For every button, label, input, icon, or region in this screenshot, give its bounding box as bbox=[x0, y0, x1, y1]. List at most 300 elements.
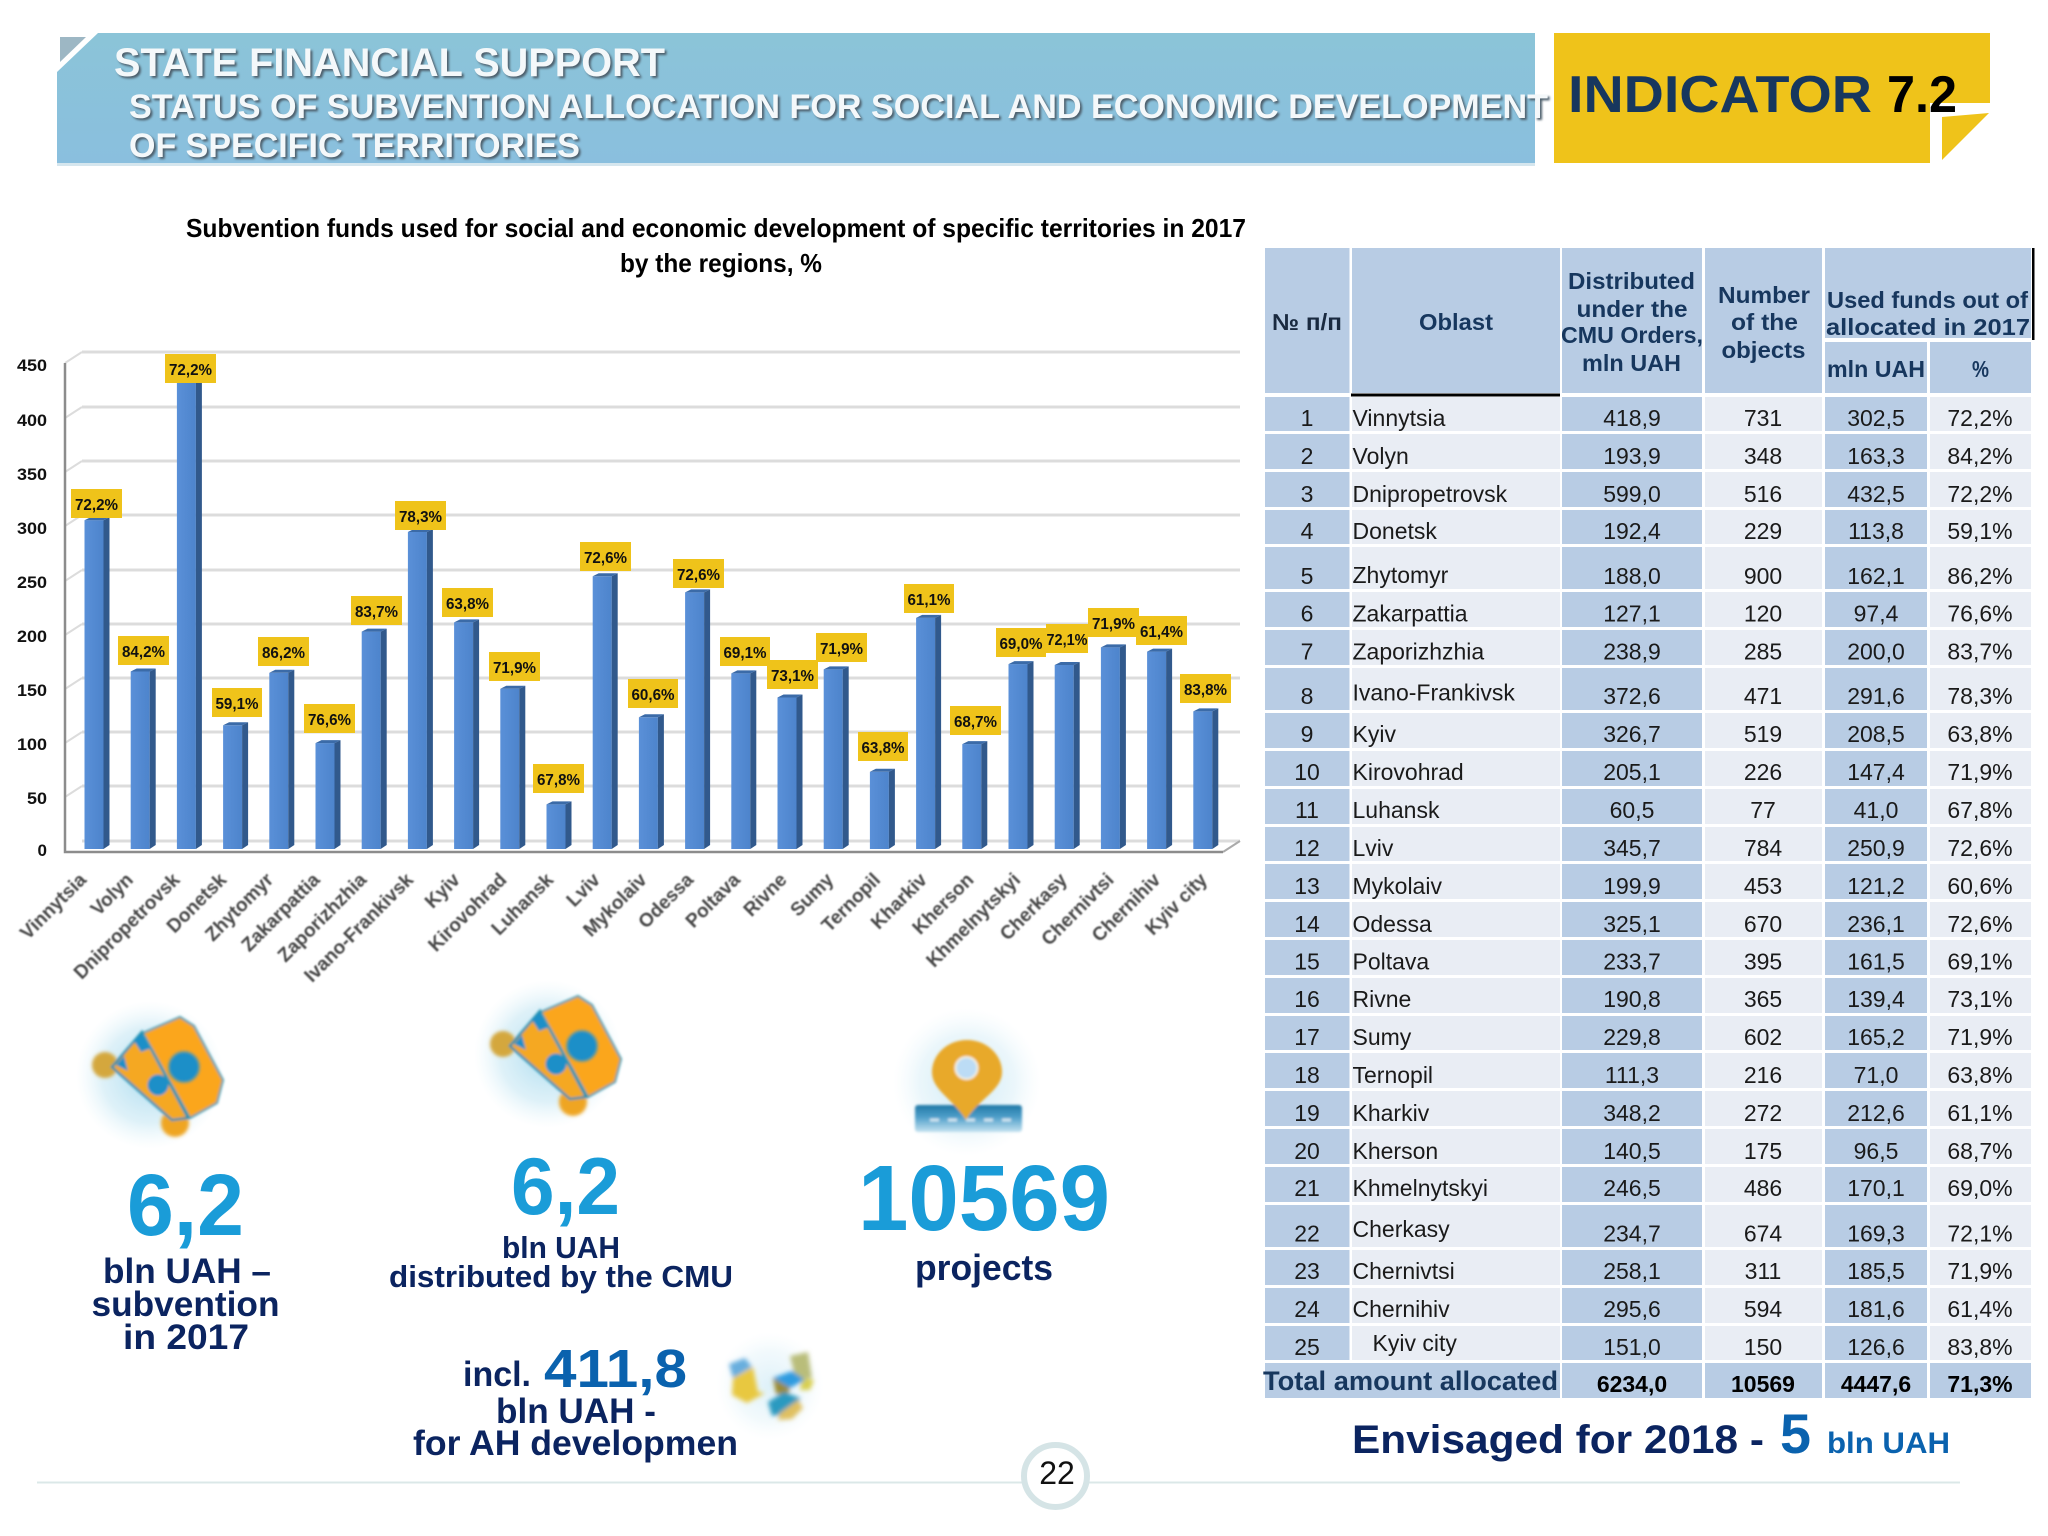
row 23: 185,5 bbox=[1847, 1258, 1905, 1284]
row 13: Mykolaiv bbox=[1352, 873, 1442, 899]
row 12 bbox=[1294, 835, 2013, 861]
row 3: 516 bbox=[1744, 481, 1782, 507]
row 14: 14 bbox=[1294, 911, 1320, 937]
stat: 10569 projects: projects bbox=[915, 1247, 1053, 1288]
row 8: 8 bbox=[1301, 683, 1313, 709]
total row: 4447,6 bbox=[1841, 1371, 1911, 1397]
row 3: 72,2% bbox=[1947, 481, 2013, 507]
bar value labels: 60,6% bbox=[632, 687, 675, 704]
row 14: 236,1 bbox=[1847, 911, 1905, 937]
table header: Oblast bbox=[1419, 309, 1493, 335]
row 4 bbox=[1301, 518, 2013, 544]
row 14: Odessa bbox=[1352, 911, 1432, 937]
category axis labels bbox=[17, 869, 1212, 987]
row 25: Kyiv city bbox=[1372, 1330, 1457, 1356]
row 23: 311 bbox=[1745, 1258, 1781, 1284]
table header: Number bbox=[1718, 282, 1810, 308]
bar value labels: 83,8% bbox=[1184, 682, 1227, 699]
category axis labels: Kharkiv bbox=[867, 869, 932, 934]
row 20: 96,5 bbox=[1854, 1138, 1898, 1164]
icon: building blocks bbox=[716, 1332, 824, 1440]
row 2: 193,9 bbox=[1603, 443, 1661, 469]
stat: 10569 projects: 10569 bbox=[858, 1146, 1110, 1250]
row 24: Chernihiv bbox=[1352, 1296, 1450, 1322]
row 3: 432,5 bbox=[1847, 481, 1905, 507]
bar value labels: 71,9% bbox=[493, 660, 536, 677]
row 7: 7 bbox=[1301, 638, 1313, 664]
table header: Distributed bbox=[1568, 268, 1695, 294]
row 12: 345,7 bbox=[1603, 835, 1661, 861]
row 1: 302,5 bbox=[1847, 405, 1905, 431]
envisaged for 2018 note: Envisaged for 2018 - bbox=[1352, 1418, 1764, 1462]
row 9: 63,8% bbox=[1947, 721, 2013, 747]
row 23: 258,1 bbox=[1603, 1258, 1661, 1284]
row 16: 365 bbox=[1744, 986, 1782, 1012]
bar value labels: 78,3% bbox=[399, 509, 442, 526]
row 7: Zaporizhzhia bbox=[1352, 638, 1484, 664]
row 8: 372,6 bbox=[1603, 683, 1661, 709]
bar chart bbox=[17, 352, 1240, 987]
table body backgrounds bbox=[1265, 397, 2031, 1360]
page number badge: 22 bbox=[1039, 1455, 1075, 1491]
row 18: 111,3 bbox=[1605, 1062, 1659, 1088]
row 1: 731 bbox=[1744, 405, 1782, 431]
row 2: 163,3 bbox=[1847, 443, 1905, 469]
row 19: 61,1% bbox=[1947, 1100, 2013, 1126]
row 10: Kirovohrad bbox=[1352, 759, 1464, 785]
heading: state financial support: STATE FINANCIAL SUPPORT bbox=[114, 41, 665, 85]
row 3: 599,0 bbox=[1603, 481, 1661, 507]
row 10: 10 bbox=[1294, 759, 1320, 785]
y axis labels: 250 bbox=[17, 573, 47, 592]
row 23: Chernivtsi bbox=[1352, 1258, 1455, 1284]
stat: 411,8 for AH development: 411,8 bbox=[544, 1339, 687, 1399]
stat: 6,2 subvention: in 2017 bbox=[123, 1318, 249, 1357]
bar value labels: 71,9% bbox=[820, 641, 863, 658]
table header: of the bbox=[1731, 309, 1798, 335]
y axis labels: 100 bbox=[17, 735, 47, 754]
row 22: 674 bbox=[1744, 1220, 1782, 1246]
row 9: Kyiv bbox=[1352, 721, 1396, 747]
indicator word: INDICATOR bbox=[1568, 66, 1872, 124]
category axis labels: Rivne bbox=[740, 870, 792, 921]
row 9: 519 bbox=[1744, 721, 1782, 747]
row 5: 188,0 bbox=[1603, 563, 1661, 589]
row 22 bbox=[1294, 1216, 2013, 1246]
row 1 bbox=[1301, 405, 2013, 431]
row 17 bbox=[1294, 1024, 2013, 1050]
row 17: 71,9% bbox=[1947, 1024, 2013, 1050]
row 12: 784 bbox=[1744, 835, 1782, 861]
row 19: 272 bbox=[1744, 1100, 1782, 1126]
table header: Used funds out of bbox=[1827, 287, 2028, 313]
row 1: Vinnytsia bbox=[1352, 405, 1446, 431]
row 12: Lviv bbox=[1352, 835, 1394, 861]
stat: 411,8 for AH development: for AH developmen bbox=[413, 1424, 738, 1463]
row 6 bbox=[1301, 600, 2013, 626]
total row bbox=[1263, 1363, 2031, 1398]
envisaged for 2018 note bbox=[1352, 1402, 1950, 1465]
row 1: 72,2% bbox=[1947, 405, 2013, 431]
row 16: 190,8 bbox=[1603, 986, 1661, 1012]
category axis labels: Odessa bbox=[635, 869, 698, 933]
bar value labels: 63,8% bbox=[862, 740, 905, 757]
row 25: 126,6 bbox=[1847, 1334, 1905, 1360]
stat: 6,2 subvention: 6,2 bbox=[127, 1157, 244, 1254]
row 18: 71,0 bbox=[1854, 1062, 1898, 1088]
row 18 bbox=[1294, 1062, 2013, 1088]
table header: mln UAH bbox=[1582, 350, 1681, 376]
row 21: 21 bbox=[1294, 1175, 1320, 1201]
row 18: 63,8% bbox=[1947, 1062, 2013, 1088]
row 20: 68,7% bbox=[1947, 1138, 2013, 1164]
row 17: 229,8 bbox=[1603, 1024, 1661, 1050]
bar value labels: 61,1% bbox=[908, 592, 951, 609]
row 20 bbox=[1294, 1138, 2013, 1164]
row 20: Kherson bbox=[1352, 1138, 1438, 1164]
row 10: 147,4 bbox=[1847, 759, 1905, 785]
row 4: Donetsk bbox=[1352, 518, 1437, 544]
row 4: 4 bbox=[1301, 518, 1314, 544]
bar value labels: 84,2% bbox=[122, 644, 165, 661]
row 16: 139,4 bbox=[1847, 986, 1905, 1012]
y axis labels bbox=[17, 356, 47, 860]
category axis labels: Zhytomyr bbox=[202, 869, 278, 946]
indicator number: 7.2 bbox=[1887, 66, 1957, 124]
row 3: Dnipropetrovsk bbox=[1352, 481, 1508, 507]
y axis labels: 300 bbox=[17, 519, 47, 538]
row 11: 60,5 bbox=[1610, 797, 1654, 823]
row 6: 127,1 bbox=[1603, 600, 1661, 626]
row 18: 216 bbox=[1744, 1062, 1782, 1088]
row 9 bbox=[1301, 721, 2013, 747]
row 20: 175 bbox=[1744, 1138, 1782, 1164]
row 15: 161,5 bbox=[1847, 948, 1905, 974]
footer rule bbox=[37, 1482, 1960, 1484]
row 9: 208,5 bbox=[1847, 721, 1905, 747]
table header bbox=[1265, 248, 2034, 396]
row 9: 326,7 bbox=[1603, 721, 1661, 747]
row 7: 83,7% bbox=[1947, 638, 2013, 664]
envisaged for 2018 note: 5 bbox=[1780, 1402, 1811, 1465]
row 9: 9 bbox=[1301, 721, 1313, 747]
row 19: 19 bbox=[1294, 1100, 1320, 1126]
y axis labels: 150 bbox=[17, 681, 47, 700]
category axis labels: Mykolaiv bbox=[580, 869, 652, 941]
category axis labels: Chernivtsi bbox=[1038, 870, 1118, 950]
y axis labels: 400 bbox=[17, 411, 47, 430]
page number badge bbox=[1024, 1445, 1087, 1507]
row 14: 670 bbox=[1744, 911, 1782, 937]
icon: money 1 bbox=[76, 1001, 224, 1149]
row 5: 900 bbox=[1744, 563, 1782, 589]
row 16: Rivne bbox=[1352, 986, 1411, 1012]
row 6: 120 bbox=[1744, 600, 1782, 626]
row 18: 18 bbox=[1294, 1062, 1320, 1088]
row 13: 199,9 bbox=[1603, 873, 1661, 899]
row 20: 20 bbox=[1294, 1138, 1320, 1164]
category axis labels: Ivano-Frankivsk bbox=[301, 869, 418, 987]
row 17: 17 bbox=[1294, 1024, 1320, 1050]
total row: 71,3% bbox=[1947, 1371, 2013, 1397]
row 12: 72,6% bbox=[1947, 835, 2013, 861]
row 13: 453 bbox=[1744, 873, 1782, 899]
row 13: 60,6% bbox=[1947, 873, 2013, 899]
stat: 6,2 distributed by the CMU: distributed by the CMU bbox=[389, 1259, 733, 1294]
row 21 bbox=[1294, 1175, 2013, 1201]
stat: 6,2 subvention: bln UAH – bbox=[103, 1252, 271, 1291]
category axis labels: Dnipropetrovsk bbox=[70, 869, 185, 984]
total row: 6234,0 bbox=[1597, 1371, 1667, 1397]
table header: mln UAH bbox=[1827, 356, 1925, 382]
row 20: 140,5 bbox=[1603, 1138, 1661, 1164]
row 8: 471 bbox=[1744, 683, 1782, 709]
row 16: 73,1% bbox=[1947, 986, 2013, 1012]
row 15: 15 bbox=[1294, 948, 1320, 974]
row 2: 348 bbox=[1744, 443, 1782, 469]
category axis labels: Zaporizhzhia bbox=[274, 869, 372, 967]
row 21: 170,1 bbox=[1847, 1175, 1905, 1201]
row 7: 200,0 bbox=[1847, 638, 1905, 664]
row 23: 23 bbox=[1294, 1258, 1320, 1284]
row 2: 84,2% bbox=[1947, 443, 2013, 469]
row 17: Sumy bbox=[1352, 1024, 1412, 1050]
category axis labels: Volyn bbox=[87, 870, 138, 920]
bar value labels: 68,7% bbox=[954, 714, 997, 731]
row 5 bbox=[1301, 562, 2013, 589]
row 8: 78,3% bbox=[1947, 683, 2013, 709]
row 15: 233,7 bbox=[1603, 948, 1661, 974]
header banner bbox=[57, 33, 1548, 166]
bar value labels: 63,8% bbox=[446, 596, 489, 613]
stat: 411,8 for AH development: incl. bbox=[463, 1355, 531, 1394]
row 15: Poltava bbox=[1352, 948, 1429, 974]
row 21: 486 bbox=[1744, 1175, 1782, 1201]
row 22: 22 bbox=[1294, 1220, 1320, 1246]
category axis labels: Kherson bbox=[909, 870, 978, 939]
category axis labels: Vinnytsia bbox=[17, 869, 91, 944]
row 13: 13 bbox=[1294, 873, 1320, 899]
row 11: 41,0 bbox=[1854, 797, 1898, 823]
row 24 bbox=[1294, 1296, 2013, 1322]
row 19 bbox=[1294, 1100, 2013, 1126]
row 22: 234,7 bbox=[1603, 1220, 1661, 1246]
row 25: 25 bbox=[1294, 1334, 1320, 1360]
row 12: 250,9 bbox=[1847, 835, 1905, 861]
row 23: 71,9% bbox=[1947, 1258, 2013, 1284]
stat: 411,8 for AH development: bln UAH - bbox=[496, 1392, 656, 1431]
row 7: 285 bbox=[1744, 638, 1782, 664]
bar value labels: 72,6% bbox=[584, 550, 627, 567]
bar value labels: 71,9% bbox=[1092, 616, 1135, 633]
chart title: by the regions, % bbox=[620, 248, 822, 278]
row 11: 67,8% bbox=[1947, 797, 2013, 823]
row 1: 1 bbox=[1301, 405, 1313, 431]
row 18: Ternopil bbox=[1352, 1062, 1433, 1088]
row 5: Zhytomyr bbox=[1352, 562, 1449, 588]
row 21: Khmelnytskyi bbox=[1352, 1175, 1488, 1201]
chart grid bbox=[65, 352, 1240, 852]
row 22: 72,1% bbox=[1947, 1220, 2013, 1246]
chart title bbox=[186, 213, 1246, 278]
y axis labels: 50 bbox=[27, 789, 47, 808]
total row: Total amount allocated bbox=[1263, 1366, 1558, 1396]
row 3 bbox=[1301, 481, 2013, 507]
row 2: Volyn bbox=[1352, 443, 1409, 469]
bar value labels: 69,1% bbox=[724, 645, 767, 662]
category axis labels: Zakarpattia bbox=[238, 869, 325, 956]
row 10: 226 bbox=[1744, 759, 1782, 785]
row 25: 150 bbox=[1744, 1334, 1782, 1360]
row 6: 76,6% bbox=[1947, 600, 2013, 626]
table header: allocated in 2017 bbox=[1826, 314, 2030, 340]
stat: 6,2 subvention bbox=[92, 1157, 280, 1357]
category axis labels: Donetsk bbox=[163, 869, 231, 938]
row 13: 121,2 bbox=[1847, 873, 1905, 899]
category axis labels: Chernihiv bbox=[1088, 869, 1165, 946]
row 5: 162,1 bbox=[1847, 563, 1905, 589]
row 23 bbox=[1294, 1258, 2013, 1284]
row 21: 246,5 bbox=[1603, 1175, 1661, 1201]
row 2: 2 bbox=[1301, 443, 1313, 469]
indicator badge bbox=[1554, 33, 1990, 163]
row 11: Luhansk bbox=[1352, 797, 1440, 823]
category axis labels: Kyiv city bbox=[1142, 869, 1212, 940]
row 14: 325,1 bbox=[1603, 911, 1661, 937]
row 25: 83,8% bbox=[1947, 1334, 2013, 1360]
category axis labels: Luhansk bbox=[488, 869, 558, 940]
bar value labels bbox=[71, 354, 1231, 793]
row 4: 113,8 bbox=[1848, 518, 1904, 544]
category axis labels: Lviv bbox=[563, 869, 605, 911]
row 15: 395 bbox=[1744, 948, 1782, 974]
bar value labels: 76,6% bbox=[308, 712, 351, 729]
category axis labels: Ternopil bbox=[818, 870, 885, 937]
category axis labels: Khmelnytskyi bbox=[923, 870, 1025, 972]
row 19: 212,6 bbox=[1847, 1100, 1905, 1126]
bar value labels: 86,2% bbox=[262, 645, 305, 662]
row 11: 77 bbox=[1750, 797, 1776, 823]
stat: 6,2 distributed by the CMU: 6,2 bbox=[511, 1142, 620, 1232]
row 24: 594 bbox=[1744, 1296, 1782, 1322]
row 3: 3 bbox=[1301, 481, 1313, 507]
row 19: 348,2 bbox=[1603, 1100, 1661, 1126]
stat: 6,2 distributed by the CMU: bln UAH bbox=[502, 1230, 620, 1265]
row 6: 6 bbox=[1301, 600, 1313, 626]
bar value labels: 83,7% bbox=[355, 604, 398, 621]
stat: 411,8 for AH development bbox=[413, 1339, 738, 1463]
table header: № п/п bbox=[1272, 309, 1342, 335]
icon: money 2 bbox=[474, 980, 622, 1128]
category axis labels: Sumy bbox=[787, 869, 839, 921]
row 7: 238,9 bbox=[1603, 638, 1661, 664]
total row: 10569 bbox=[1731, 1371, 1795, 1397]
row 16 bbox=[1294, 986, 2013, 1012]
row 11 bbox=[1295, 797, 2013, 823]
row 2 bbox=[1301, 443, 2013, 469]
row 12: 12 bbox=[1294, 835, 1320, 861]
row 7 bbox=[1301, 638, 2013, 664]
table header: CMU Orders, bbox=[1561, 322, 1703, 348]
row 14 bbox=[1294, 911, 2013, 937]
row 11: 11 bbox=[1295, 797, 1319, 823]
table bbox=[1263, 248, 2034, 1398]
envisaged for 2018 note: bln UAH bbox=[1827, 1427, 1950, 1460]
row 22: Cherkasy bbox=[1352, 1216, 1450, 1242]
table header: % bbox=[1972, 356, 1989, 382]
category axis labels: Kyiv bbox=[421, 869, 465, 913]
bar value labels: 69,0% bbox=[1000, 636, 1043, 653]
row 25 bbox=[1294, 1330, 2013, 1360]
subheading line 2: OF SPECIFIC TERRITORIES bbox=[129, 127, 580, 165]
bar value labels: 67,8% bbox=[537, 772, 580, 789]
stat: 6,2 subvention: subvention bbox=[92, 1285, 280, 1324]
category axis labels: Kirovohrad bbox=[425, 870, 511, 956]
row 5: 5 bbox=[1301, 563, 1313, 589]
bar value labels: 72,1% bbox=[1046, 632, 1088, 649]
bar value labels: 72,6% bbox=[677, 567, 720, 584]
category axis labels: Poltava bbox=[682, 869, 745, 932]
row 24: 181,6 bbox=[1847, 1296, 1905, 1322]
bar value labels: 72,2% bbox=[75, 497, 118, 514]
y axis labels: 450 bbox=[17, 356, 47, 375]
y axis labels: 350 bbox=[17, 465, 47, 484]
row 22: 169,3 bbox=[1847, 1220, 1905, 1246]
subheading line 1: STATUS OF SUBVENTION ALLOCATION FOR SOCIAL AND ECONOMIC DEVELOPMENT bbox=[129, 88, 1548, 126]
row 10: 205,1 bbox=[1603, 759, 1661, 785]
bar value labels: 59,1% bbox=[216, 696, 259, 713]
row 24: 24 bbox=[1294, 1296, 1320, 1322]
row 6: Zakarpattia bbox=[1352, 600, 1468, 626]
row 1: 418,9 bbox=[1603, 405, 1661, 431]
row 10 bbox=[1294, 759, 2013, 785]
bar value labels: 72,2% bbox=[169, 362, 212, 379]
row 19: Kharkiv bbox=[1352, 1100, 1430, 1126]
row 16: 16 bbox=[1294, 986, 1320, 1012]
row 15: 69,1% bbox=[1947, 948, 2013, 974]
y axis labels: 200 bbox=[17, 627, 47, 646]
row 8 bbox=[1301, 680, 2013, 709]
table header: objects bbox=[1722, 337, 1806, 363]
row 5: 86,2% bbox=[1947, 563, 2013, 589]
row 8: 291,6 bbox=[1847, 683, 1905, 709]
row 4: 192,4 bbox=[1603, 518, 1661, 544]
row 10: 71,9% bbox=[1947, 759, 2013, 785]
row 21: 69,0% bbox=[1947, 1175, 2013, 1201]
row 8: Ivano-Frankivsk bbox=[1352, 680, 1515, 706]
row 4: 59,1% bbox=[1947, 518, 2013, 544]
stat: 6,2 distributed by the CMU bbox=[389, 1142, 733, 1294]
row 6: 97,4 bbox=[1854, 600, 1899, 626]
row 17: 602 bbox=[1744, 1024, 1782, 1050]
bar value labels: 61,4% bbox=[1140, 624, 1183, 641]
row 15 bbox=[1294, 948, 2013, 974]
row 4: 229 bbox=[1744, 518, 1782, 544]
row 14: 72,6% bbox=[1947, 911, 2013, 937]
row 24: 295,6 bbox=[1603, 1296, 1661, 1322]
row 25: 151,0 bbox=[1603, 1334, 1661, 1360]
bars bbox=[84, 376, 1218, 849]
row 17: 165,2 bbox=[1847, 1024, 1905, 1050]
icon: map pin on road bbox=[893, 1008, 1041, 1156]
row 24: 61,4% bbox=[1947, 1296, 2013, 1322]
category axis labels: Cherkasy bbox=[996, 869, 1072, 945]
row 13 bbox=[1294, 873, 2013, 899]
table header: under the bbox=[1576, 296, 1688, 322]
bar value labels: 73,1% bbox=[771, 668, 814, 685]
y axis labels: 0 bbox=[38, 841, 47, 860]
chart title: Subvention funds used for social and economic development of specific territories in 2017 bbox=[186, 213, 1246, 243]
